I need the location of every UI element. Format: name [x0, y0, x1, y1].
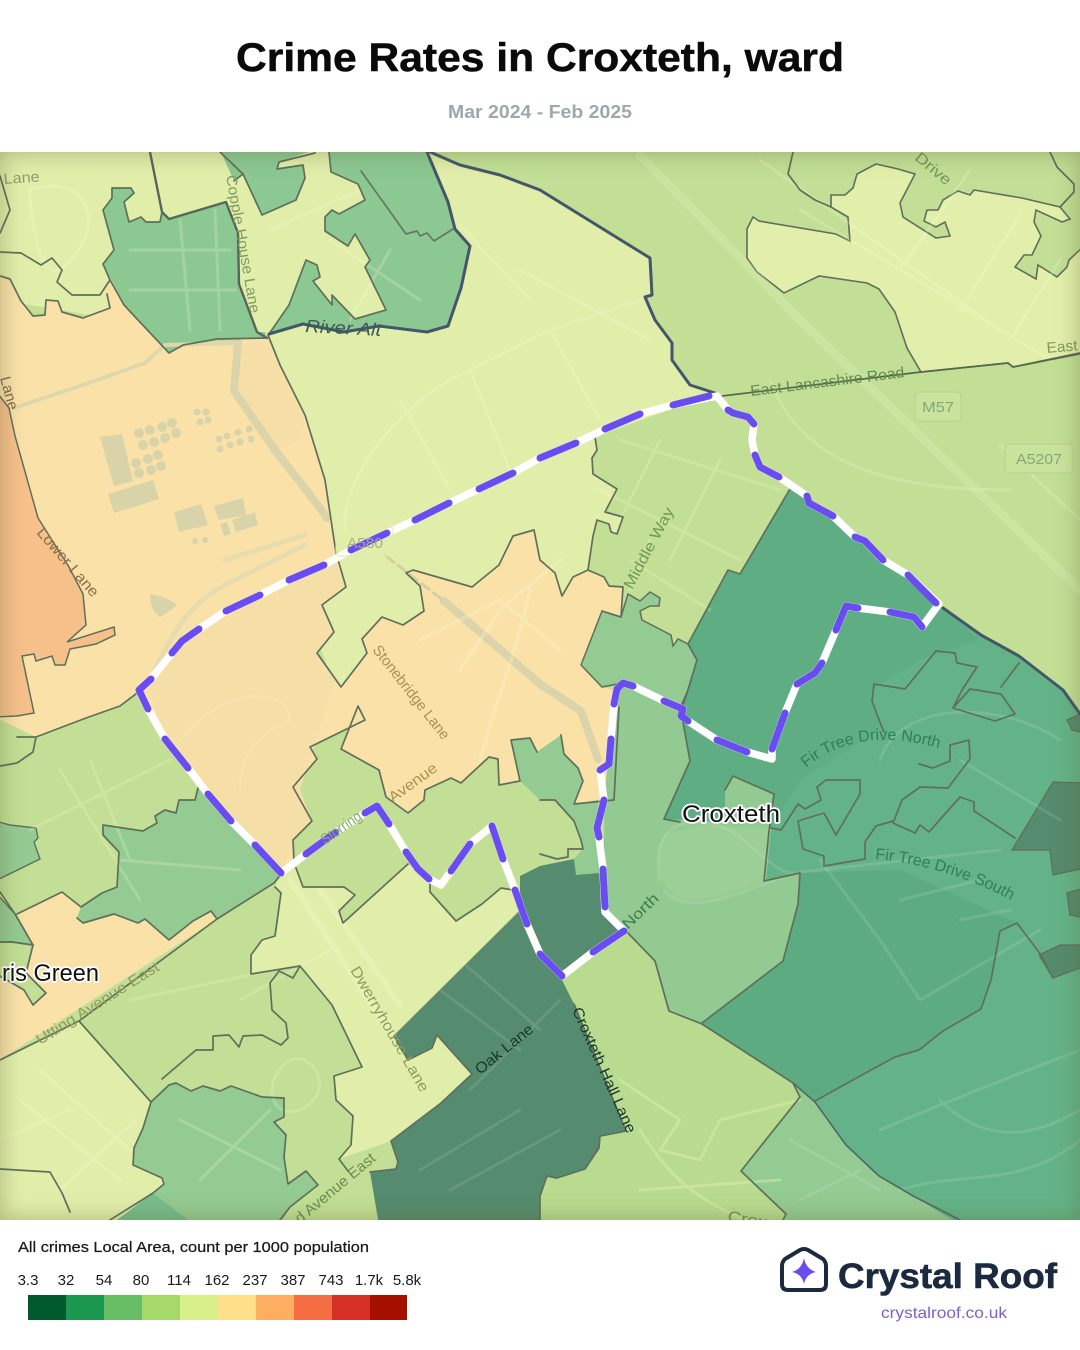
river lines — [269, 152, 1080, 714]
map road network — [0, 155, 1080, 1190]
ward boundary route — [139, 396, 939, 976]
region: right edge darkest patches — [1012, 712, 1080, 978]
region: top right medium green river block — [269, 150, 470, 334]
map labels: River Alt — [305, 316, 383, 340]
legend — [18, 1239, 422, 1320]
region: darker green around ward meadow — [886, 566, 942, 607]
legend title: All crimes Local Area, count per 1000 population — [18, 1239, 369, 1256]
region: light road loop in park — [659, 825, 800, 900]
region: top-left medium green block — [103, 188, 267, 353]
legend values: 743 — [318, 1272, 344, 1289]
region: orange central area — [0, 276, 623, 873]
legend colour scale — [28, 1295, 407, 1320]
region: pale north-east area — [747, 164, 1080, 372]
road sign: M57 — [915, 392, 961, 421]
road sign: A5207: A5207 — [1016, 451, 1062, 468]
legend values: 3.3 — [18, 1272, 38, 1289]
region: far left medium patches — [0, 821, 40, 945]
region: top medium green wedge — [221, 152, 309, 214]
map labels: North — [619, 890, 662, 933]
region: pale Dwerryhouse strip — [251, 864, 520, 1159]
map labels: Utting Avenue East — [33, 958, 163, 1048]
region: southern medium green patch — [133, 1083, 318, 1225]
region: Croxteth Hall medium patch — [742, 1086, 952, 1220]
region: darker eastern band — [702, 870, 1017, 1101]
region: pale north area — [0, 152, 715, 700]
legend values: 237 — [242, 1272, 268, 1289]
place label: Norris Green: ris Green — [2, 960, 99, 987]
map labels: Croxteth Hall Lane — [568, 1005, 639, 1136]
region: orange darker parkland — [294, 746, 314, 816]
map labels: Fir Tree Drive South — [876, 848, 1014, 900]
map labels: East — [1046, 337, 1079, 357]
region: medium green south of route — [511, 735, 600, 875]
region: deep orange west — [0, 390, 115, 717]
title: Crime Rates in Croxteth, ward — [236, 36, 844, 80]
road sign: A5207 — [1005, 444, 1073, 473]
region: medium green Croxteth park — [604, 683, 800, 1023]
map labels: Copple House Lane — [222, 174, 263, 315]
legend values — [18, 1272, 422, 1289]
map labels: Lane — [3, 169, 40, 188]
region: medium green Middle Way patch — [581, 592, 697, 706]
subtitle: date range: Mar 2024 - Feb 2025 — [448, 102, 632, 122]
legend values: 1.7k — [355, 1272, 384, 1289]
region: Croxteth Hall light green — [540, 931, 800, 1225]
icon: house with star — [782, 1249, 826, 1290]
map labels: Oak Lane — [472, 1021, 537, 1078]
road sign: A580: A580 — [347, 535, 383, 552]
road sign: M57: M57 — [922, 399, 954, 416]
region: left medium green patch — [77, 788, 282, 940]
map labels: Avenue — [385, 760, 441, 806]
road sign: A580 — [336, 526, 393, 556]
map labels: Fir Tree Drive North — [800, 728, 940, 767]
legend values: 80 — [133, 1272, 149, 1289]
place label: Croxteth: Croxteth — [682, 801, 780, 828]
map labels: d Avenue East — [292, 1149, 380, 1227]
map labels: Lower Lane — [33, 524, 102, 601]
map labels: Stonebridge Lane — [369, 642, 453, 743]
legend values: 32 — [58, 1272, 74, 1289]
region: Norris Green orange — [0, 892, 217, 1063]
legend values: 114 — [167, 1272, 191, 1289]
logo: Crystal Roof — [782, 1249, 1057, 1322]
map industrial features and rail — [14, 343, 598, 759]
map labels: Dwerryhouse Lane — [347, 964, 432, 1095]
region boundary lines — [0, 152, 1080, 1220]
legend values: 387 — [280, 1272, 306, 1289]
map labels: Storring — [318, 808, 365, 848]
logo wordmark: Crystal Roof — [838, 1257, 1057, 1296]
legend values: 162 — [204, 1272, 230, 1289]
map labels: East Lancashire Road — [749, 364, 905, 400]
legend values: 54 — [96, 1272, 112, 1289]
region: pale south-west area — [0, 1021, 164, 1225]
map labels: Crox — [726, 1208, 769, 1231]
map labels: Drive — [911, 149, 955, 189]
legend values: 5.8k — [393, 1272, 422, 1289]
website link: crystalroof.co.uk — [881, 1305, 1008, 1322]
region: darkest Oak Lane green — [370, 859, 626, 1225]
region: eastern dark green — [600, 489, 1080, 1225]
region: bottom left darker patch — [116, 1194, 188, 1220]
map labels: Middle Way — [621, 504, 678, 592]
